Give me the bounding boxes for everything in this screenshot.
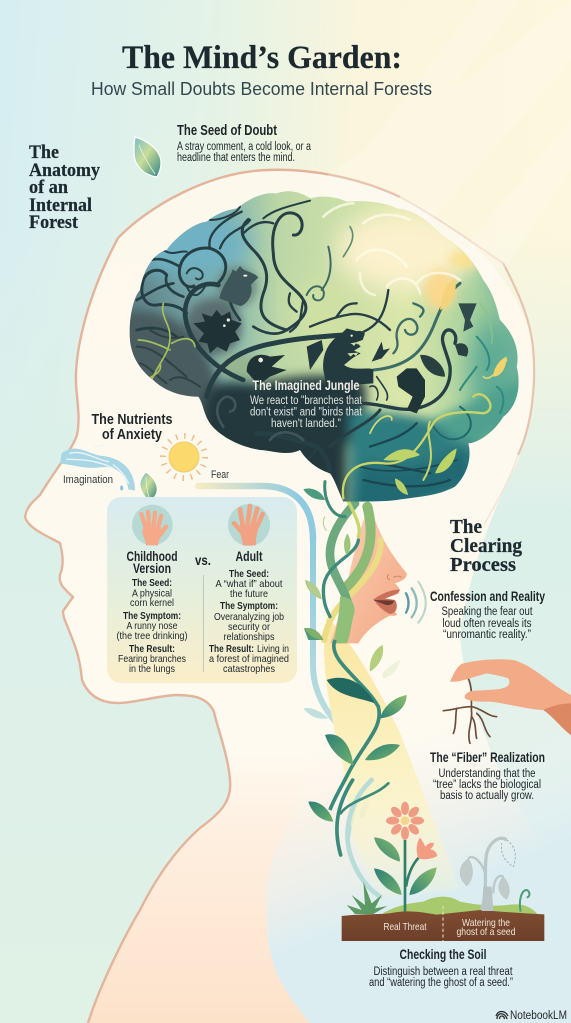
text: adult column: The Symptom: [220, 600, 278, 612]
lower right blue field [266, 690, 571, 1023]
text: the fiber realization [430, 750, 545, 802]
heading: the anatomy of an internal forest: Internal [29, 195, 92, 216]
text: the seed of doubt: A stray comment, a cold look, or a [177, 141, 311, 153]
sun beams [317, 0, 571, 320]
pipe: fear and imagination flow [198, 486, 380, 897]
ghost plant [460, 838, 529, 912]
text: the seed of doubt: headline that enters the mind. [177, 152, 295, 164]
creature: thorned bush and leaf [397, 368, 425, 413]
label: real threat: Real Threat [384, 921, 427, 933]
text: adult column: catastrophes [223, 663, 275, 675]
lower vine [337, 780, 388, 897]
divider [202, 575, 204, 672]
text: the fiber realization: Understanding that the [438, 768, 536, 780]
head silhouette [25, 170, 571, 1023]
text: childhood column: A runny nose [126, 620, 178, 632]
icon: sun [163, 436, 205, 478]
heading: the anatomy of an internal forest: of an [29, 177, 68, 198]
text: adult column [209, 549, 289, 675]
text: adult column: Adult [236, 549, 263, 564]
text: childhood column [116, 549, 188, 675]
text: the imagined jungle: don't exist" and "birds that [250, 406, 363, 418]
text: checking the soil: and “watering the ghost of a seed.” [369, 977, 513, 989]
label: watering the ghost of a seed [456, 917, 516, 938]
label: fear: Fear [211, 469, 229, 481]
icon: water stream [60, 445, 135, 491]
soil [342, 910, 544, 941]
text: the fiber realization: basis to actually grow. [440, 790, 534, 802]
light folds [323, 203, 460, 295]
icon: child hand [132, 505, 173, 545]
face profile [330, 503, 407, 643]
text: childhood column: in the lungs [129, 663, 175, 675]
icon: adult hand [228, 504, 270, 546]
text: adult column: Living in [257, 643, 289, 655]
mouth [373, 589, 400, 614]
text: the fiber realization: “tree” lacks the biological [433, 779, 541, 791]
grass [347, 882, 387, 914]
text: childhood column: The Symptom: [123, 610, 181, 622]
text: adult column: The Result: [209, 643, 254, 655]
text: the seed of doubt: The Seed of Doubt [177, 123, 277, 139]
text: adult column: the future [230, 588, 268, 600]
label: imagination: Imagination [63, 474, 113, 486]
beam of light [324, 617, 460, 897]
heading: the nutrients of anxiety: The Nutrients [92, 412, 172, 428]
heading: the clearing process: The [450, 516, 482, 538]
text: childhood column: The Seed: [132, 577, 172, 589]
bright vines [138, 303, 507, 498]
heading: the anatomy of an internal forest: The [29, 142, 59, 163]
vine and hair below the brain [303, 480, 407, 643]
text: vs: vs. [195, 553, 211, 568]
speech arcs [406, 582, 426, 623]
title: The Mind’s Garden: [122, 40, 402, 76]
heading: the anatomy of an internal forest: Anatomy [29, 160, 100, 181]
panel: childhood vs adult [107, 497, 297, 683]
text: adult column: Overanalyzing job [214, 611, 284, 623]
label: watering the ghost of a seed: Watering the [462, 917, 510, 929]
text: childhood column: (the tree drinking) [116, 630, 188, 642]
text: the imagined jungle: haven't landed." [271, 418, 341, 430]
creature: wolf [219, 266, 258, 306]
label: watering the ghost of a seed: ghost of a seed [456, 926, 516, 938]
brain with internal forest [117, 187, 527, 513]
text: the seed of doubt [177, 123, 311, 164]
vine stem and leaves [303, 582, 407, 810]
subtitle: How Small Doubts Become Internal Forests [91, 79, 432, 99]
creature: small bird [247, 355, 287, 385]
text: confession and reality: “unromantic reality.” [443, 629, 531, 641]
flower [374, 802, 437, 912]
text: confession and reality: Speaking the fear out [442, 606, 533, 618]
heading: the anatomy of an internal forest: Forest [29, 212, 79, 233]
heading: the nutrients of anxiety [92, 412, 172, 443]
text: the imagined jungle: The Imagined Jungle [252, 378, 360, 393]
text: the imagined jungle [250, 378, 363, 430]
text: childhood column: corn kernel [130, 597, 174, 609]
icon: seed [140, 472, 157, 500]
text: adult column: The Seed: [229, 568, 269, 580]
text: checking the soil: Checking the Soil [400, 947, 486, 962]
text: childhood column: Fearing branches [118, 653, 186, 665]
text: adult column: relationships [224, 631, 274, 643]
title [91, 40, 432, 99]
heading: the anatomy of an internal forest [29, 142, 100, 233]
creature: dragon [323, 328, 373, 387]
text: the imagined jungle: We react to "branches that [250, 395, 363, 407]
branches [137, 201, 503, 500]
text: adult column: security or [228, 621, 270, 633]
text: childhood column: Version [133, 561, 171, 576]
heading: the clearing process: Clearing [450, 535, 522, 557]
text: childhood column: A physical [132, 588, 172, 600]
heading: the clearing process: Process [450, 554, 516, 576]
text: checking the soil: Distinguish between a real threat [374, 966, 513, 978]
heading: the clearing process [450, 516, 522, 576]
text: checking the soil [369, 947, 513, 989]
hills [380, 897, 538, 915]
text: childhood column: The Result: [129, 643, 175, 655]
text: confession and reality: loud often reveals its [442, 618, 532, 630]
roots [443, 678, 497, 743]
heading: the nutrients of anxiety: of Anxiety [102, 427, 162, 443]
text: adult column: A “what if” about [216, 578, 283, 590]
hair strands [323, 480, 381, 640]
text: adult column: a forest of imagined [209, 653, 289, 665]
illustration: hand pulling roots [443, 659, 571, 743]
text: confession and reality [430, 589, 545, 641]
illustration: soil and plants [308, 780, 544, 941]
text: childhood column: Childhood [126, 549, 178, 564]
dark lower regions [117, 311, 527, 513]
icon: seed of doubt [134, 137, 161, 177]
creature: spiky bird [193, 310, 242, 353]
